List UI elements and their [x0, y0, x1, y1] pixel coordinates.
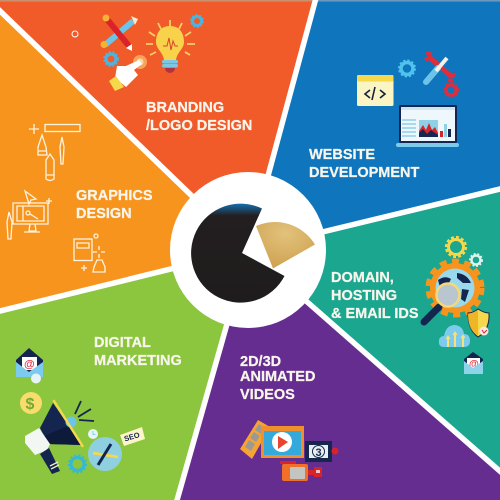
icon: camera	[280, 461, 322, 481]
icon: email envelope: @	[469, 359, 479, 370]
heading: animated videos: VIDEOS	[240, 387, 295, 403]
heading: branding / logo design: /LOGO DESIGN	[146, 118, 252, 134]
icon: film strip	[240, 420, 270, 459]
heading: graphics design: GRAPHICS	[76, 188, 153, 204]
icon: yellow gear	[446, 237, 466, 257]
icon: SEO tag: SEO	[123, 430, 141, 443]
icon: email envelope	[464, 352, 483, 374]
icon: gear	[69, 455, 86, 473]
heading: animated videos: ANIMATED	[240, 369, 315, 385]
icon: gear red	[444, 83, 458, 97]
icon: pointing hand	[109, 55, 147, 91]
heading: domain, hosting and email: & EMAIL IDS	[331, 306, 419, 322]
heading: website development	[309, 147, 420, 181]
icon: gears	[72, 15, 203, 66]
icon: pencil and pen circle	[88, 437, 122, 471]
panel: 2D/3D animated videos	[177, 250, 500, 500]
heading: digital marketing: DIGITAL	[94, 335, 151, 351]
icon: tool outlines	[7, 124, 105, 272]
icon: dollar coin	[20, 392, 42, 414]
center logo	[170, 172, 326, 328]
icon: crossed pencils	[100, 14, 138, 51]
heading: domain, hosting and email: HOSTING	[331, 288, 397, 304]
panel: website development	[248, 0, 500, 250]
icon: globe in orange gear with magnifier	[424, 261, 482, 322]
icon: video player	[261, 426, 304, 458]
heading: domain, hosting and email	[331, 270, 419, 322]
icon: email envelope: @	[24, 358, 35, 370]
icon: megaphone	[25, 401, 94, 474]
heading: animated videos	[240, 354, 315, 403]
icon: laptop dashboard	[396, 105, 459, 147]
heading: website development: DEVELOPMENT	[309, 165, 420, 181]
heading: domain, hosting and email: DOMAIN,	[331, 270, 394, 286]
icon: light bulb	[146, 20, 195, 73]
heading: graphics design: DESIGN	[76, 206, 132, 222]
heading: branding / logo design: BRANDING	[146, 100, 224, 116]
icon: shield	[468, 309, 489, 337]
heading: website development: WEBSITE	[309, 147, 375, 163]
heading: graphics design	[76, 188, 153, 222]
icon: dollar coin: $	[26, 396, 34, 413]
heading: animated videos: 2D/3D	[240, 354, 281, 370]
heading: digital marketing: MARKETING	[94, 353, 182, 369]
icon: white gear	[470, 254, 482, 266]
icon: countdown film	[305, 441, 338, 462]
icon: clock	[88, 429, 98, 439]
icon: email envelope	[16, 348, 43, 384]
icon: gear blue	[399, 60, 415, 76]
icon: upload cloud	[439, 325, 470, 347]
icon: SEO tag	[120, 427, 145, 446]
heading: branding / logo design	[146, 100, 252, 134]
icon: countdown film: 3	[316, 447, 322, 459]
logo: black pie	[191, 204, 284, 303]
icon: code window	[357, 75, 394, 106]
panel: graphics design	[0, 11, 248, 311]
icon: wrench and screwdriver	[425, 53, 455, 82]
logo: gold slice	[256, 222, 315, 268]
panel: branding / logo design	[0, 0, 316, 250]
panel: digital marketing	[0, 250, 248, 500]
heading: digital marketing	[94, 335, 182, 369]
panel: domain, hosting and email	[248, 189, 500, 471]
